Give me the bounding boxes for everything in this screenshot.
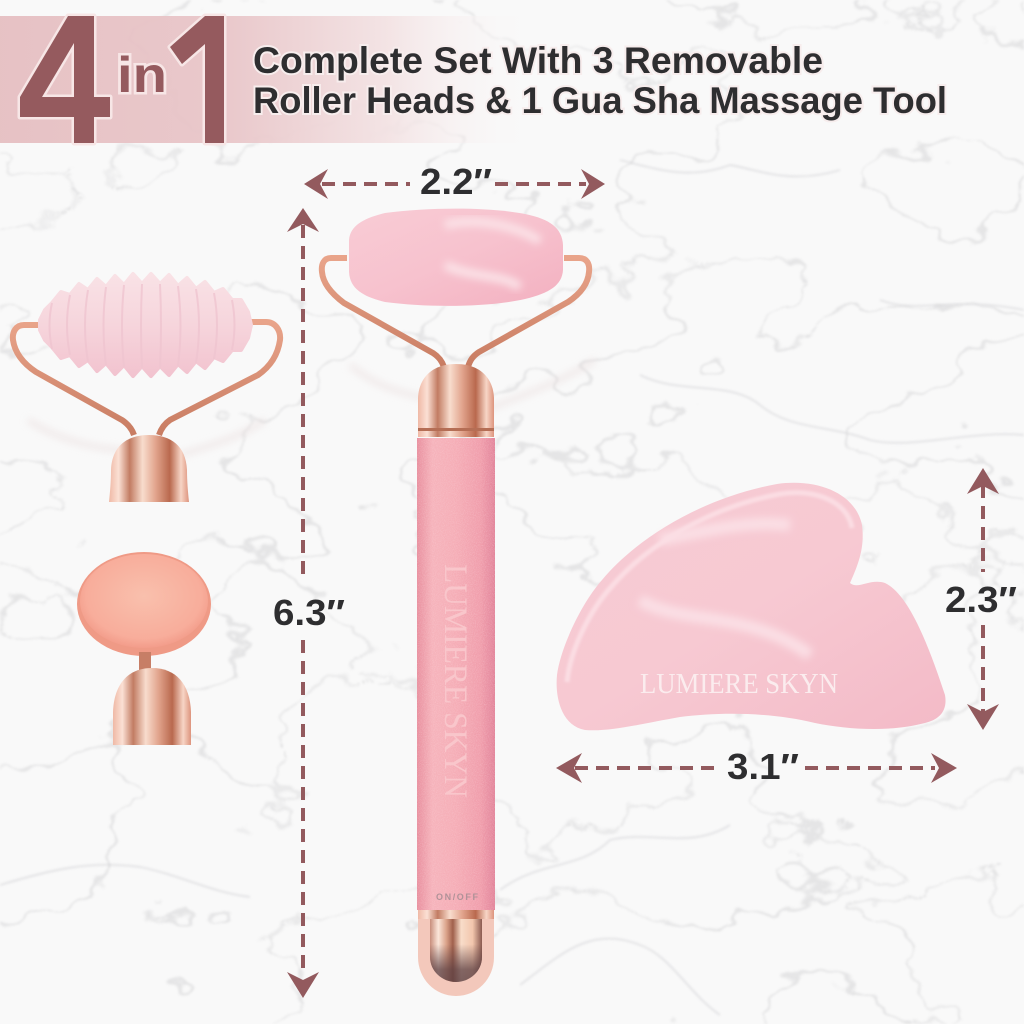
heading text: Roller Heads & 1 Gua Sha Massage Tool — [253, 79, 947, 121]
reflections — [28, 360, 595, 455]
rose quartz roller — [349, 209, 563, 306]
dimension: width 3.1: 3.1″ — [727, 746, 799, 787]
dimension: width 2.2 — [304, 161, 605, 202]
4 in 1 badge: in — [117, 47, 167, 103]
handle — [417, 438, 495, 910]
on/off label: ON/OFF — [436, 892, 478, 902]
heading band — [0, 16, 947, 143]
roller frame — [322, 258, 589, 367]
collar — [418, 364, 494, 437]
spiked roller head — [13, 274, 280, 502]
dimension: height 2.3: 2.3″ — [945, 579, 1017, 620]
dimension: height 6.3: 6.3″ — [273, 592, 345, 633]
dimension: width 3.1 — [556, 746, 957, 787]
flat disc head — [77, 552, 211, 745]
dimension: height 2.3 — [945, 468, 1017, 730]
metal band — [418, 910, 494, 919]
4 in 1 badge — [20, 16, 224, 143]
heading text: Complete Set With 3 Removable — [253, 39, 823, 81]
engraved brand: LUMIERE SKYN — [437, 564, 473, 798]
heading text — [253, 39, 947, 121]
engraved brand: LUMIERE SKYN — [640, 669, 838, 700]
dimension: height 6.3 — [273, 208, 345, 998]
main facial roller — [322, 209, 589, 996]
gua sha board — [557, 483, 946, 730]
metal tip — [418, 919, 494, 996]
dimension: width 2.2: 2.2″ — [420, 161, 492, 202]
